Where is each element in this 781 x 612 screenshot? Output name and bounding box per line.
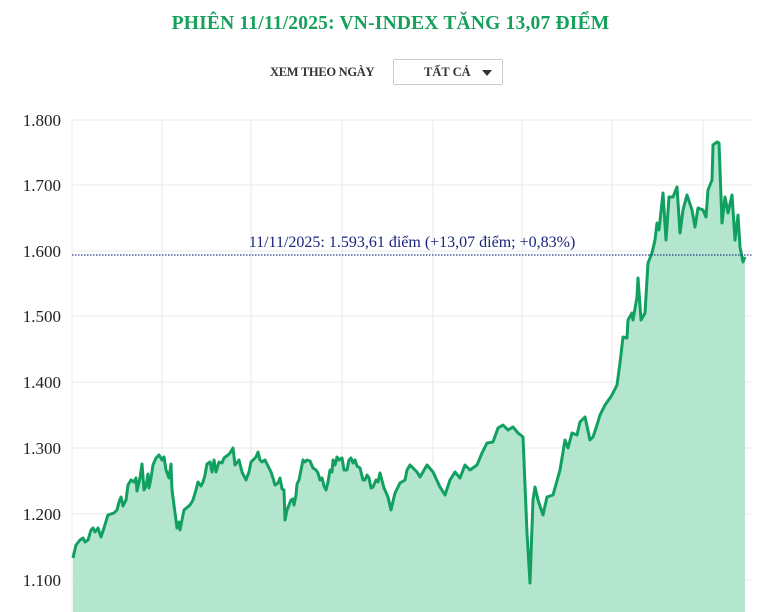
y axis labels: 1.500 [23,307,61,326]
area and line series [73,142,745,612]
title: PHIÊN 11/11/2025: VN-INDEX TĂNG 13,07 ĐIỂM [172,13,609,34]
y axis labels: 1.700 [23,176,61,195]
y axis labels [23,111,61,590]
y axis labels: 1.600 [23,242,61,261]
y axis labels: 1.800 [23,111,61,130]
y axis labels: 1.400 [23,373,61,392]
y axis labels: 1.200 [23,505,61,524]
reference line [72,254,752,256]
filter label: XEM THEO NGÀY [270,65,374,79]
y axis labels: 1.100 [23,571,61,590]
dropdown: TẤT CẢ [424,65,471,79]
y axis labels: 1.300 [23,439,61,458]
date filter control [270,59,503,85]
reference label: 11/11/2025: 1.593,61 điểm (+13,07 điểm; +0,83%) [249,234,575,251]
dropdown [393,59,503,85]
